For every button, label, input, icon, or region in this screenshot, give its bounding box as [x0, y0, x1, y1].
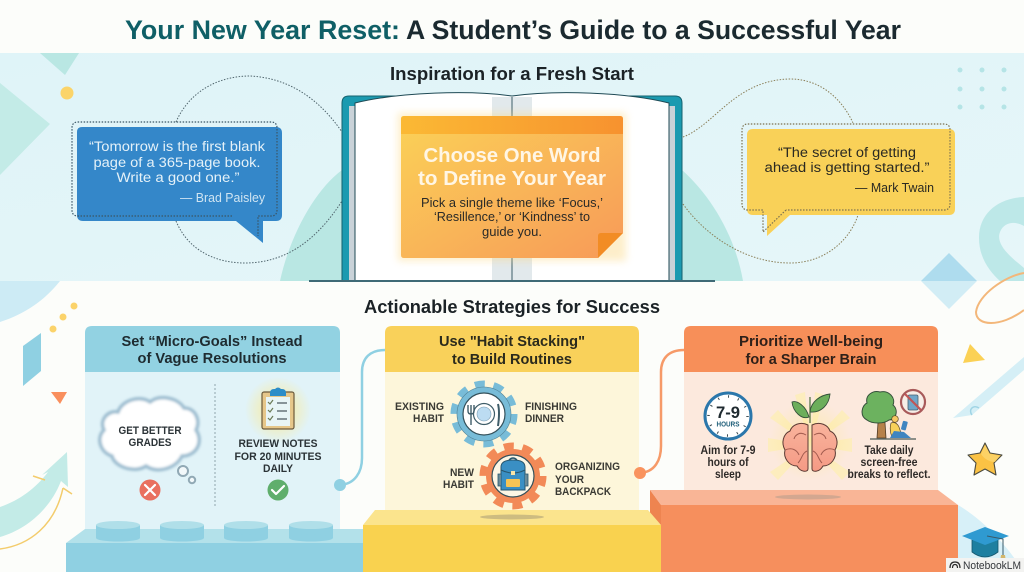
gear text: existing: HABIT	[413, 413, 444, 425]
callout: Brad Paisley quote: “Tomorrow is the first blank	[89, 139, 265, 154]
icon: tree, reader and no-phone sign	[862, 390, 925, 439]
callout: Mark Twain quote: ahead is getting started.”	[764, 160, 930, 175]
book	[309, 93, 715, 282]
sleep text: sleep	[715, 469, 741, 481]
block: blue base	[66, 521, 363, 572]
icon: clock: HOURS	[716, 420, 740, 428]
icon: gear with backpack	[483, 446, 543, 506]
action text: FOR 20 MINUTES	[234, 451, 322, 463]
break text: breaks to reflect.	[848, 469, 930, 481]
callout: Mark Twain quote	[742, 124, 955, 236]
gear text: backpack: ORGANIZING	[555, 461, 620, 473]
panel heading: habit stacking	[439, 333, 585, 368]
action text: DAILY	[263, 463, 294, 475]
panel heading: well-being: for a Sharper Brain	[746, 351, 876, 368]
gear text: backpack: YOUR	[555, 474, 584, 486]
lower decorations right	[921, 273, 1024, 572]
gear text: backpack: BACKPACK	[555, 486, 611, 498]
action text	[234, 438, 322, 475]
gear text: dinner: FINISHING	[525, 401, 577, 413]
panel heading: habit stacking: to Build Routines	[452, 351, 572, 368]
panel: well-being	[650, 326, 958, 572]
gear text: new	[443, 467, 475, 491]
panel heading: habit stacking: Use "Habit Stacking"	[439, 333, 585, 350]
gear text: existing: EXISTING	[395, 401, 444, 413]
panel: inspiration band	[0, 53, 1024, 281]
title	[125, 15, 901, 45]
callout: Brad Paisley quote: page of a 365-page book.	[94, 155, 260, 170]
thought text: GRADES	[128, 437, 172, 449]
badge: NotebookLM: NotebookLM	[963, 560, 1021, 572]
sticky note: ‘Resillence,’ or ‘Kindness’ to	[434, 210, 590, 224]
connector: blue dotted loop	[176, 76, 342, 263]
sleep text	[700, 445, 756, 481]
callout: Brad Paisley quote	[72, 122, 282, 243]
gear text: dinner	[525, 401, 577, 425]
panel heading: micro-goals: Set “Micro-Goals” Instead	[122, 333, 302, 350]
icon: star	[968, 443, 1002, 475]
sticky note: Choose One Word	[424, 144, 600, 167]
connector: orange	[634, 350, 684, 479]
sleep text: Aim for 7-9	[700, 445, 756, 457]
block: orange base	[650, 490, 958, 572]
decoration dots	[958, 68, 1006, 110]
break text: screen-free	[860, 457, 918, 469]
gear text: new: NEW	[450, 467, 475, 479]
sleep text: hours of	[708, 457, 749, 469]
icon: brain with sprout	[768, 392, 852, 480]
badge: NotebookLM	[946, 558, 1024, 572]
callout: Mark Twain quote: “The secret of getting	[778, 145, 916, 160]
break text: Take daily	[864, 445, 914, 457]
sticky note: to Define Your Year	[418, 167, 606, 190]
panel: habit stacking	[363, 326, 661, 572]
thought text	[118, 425, 182, 449]
callout: Brad Paisley quote: — Brad Paisley	[180, 190, 265, 205]
gear text: new: HABIT	[443, 479, 474, 491]
panel: micro-goals	[85, 326, 340, 532]
thought text: GET BETTER	[118, 425, 182, 437]
panel heading: well-being: Prioritize Well-being	[739, 333, 883, 350]
heading: strategies: Actionable Strategies for Success	[364, 297, 660, 317]
callout: Mark Twain quote: — Mark Twain	[855, 180, 934, 195]
panel heading: well-being	[739, 333, 883, 368]
panel heading: micro-goals	[122, 333, 302, 367]
connector: blue	[334, 350, 385, 491]
sticky note: guide you.	[482, 225, 542, 239]
connector: yellow dotted loop	[683, 79, 858, 263]
icon: graduation cap	[962, 527, 1009, 562]
gear text: backpack	[555, 461, 620, 498]
icon: check	[268, 480, 288, 500]
icon: clipboard	[245, 377, 311, 443]
icon: clock: 7-9	[716, 403, 740, 422]
icon: cross	[140, 480, 160, 500]
icon: gear with plate	[454, 384, 514, 444]
title: Your New Year Reset:	[125, 15, 400, 45]
lower decorations left	[0, 281, 78, 549]
sticky note	[398, 113, 626, 261]
gear text: dinner: DINNER	[525, 413, 564, 425]
callout: Brad Paisley quote: Write a good one.”	[116, 170, 240, 185]
break text	[848, 445, 930, 481]
gear text: existing	[395, 401, 444, 425]
panel heading: micro-goals: of Vague Resolutions	[138, 350, 286, 367]
icon: thought cloud	[100, 398, 199, 483]
heading: inspiration: Inspiration for a Fresh Start	[390, 64, 634, 84]
action text: REVIEW NOTES	[238, 438, 318, 450]
sticky note: Pick a single theme like ‘Focus,’	[421, 196, 603, 210]
block: yellow base	[363, 510, 661, 572]
title: A Student’s Guide to a Successful Year	[406, 15, 901, 45]
icon: clock	[705, 393, 751, 439]
